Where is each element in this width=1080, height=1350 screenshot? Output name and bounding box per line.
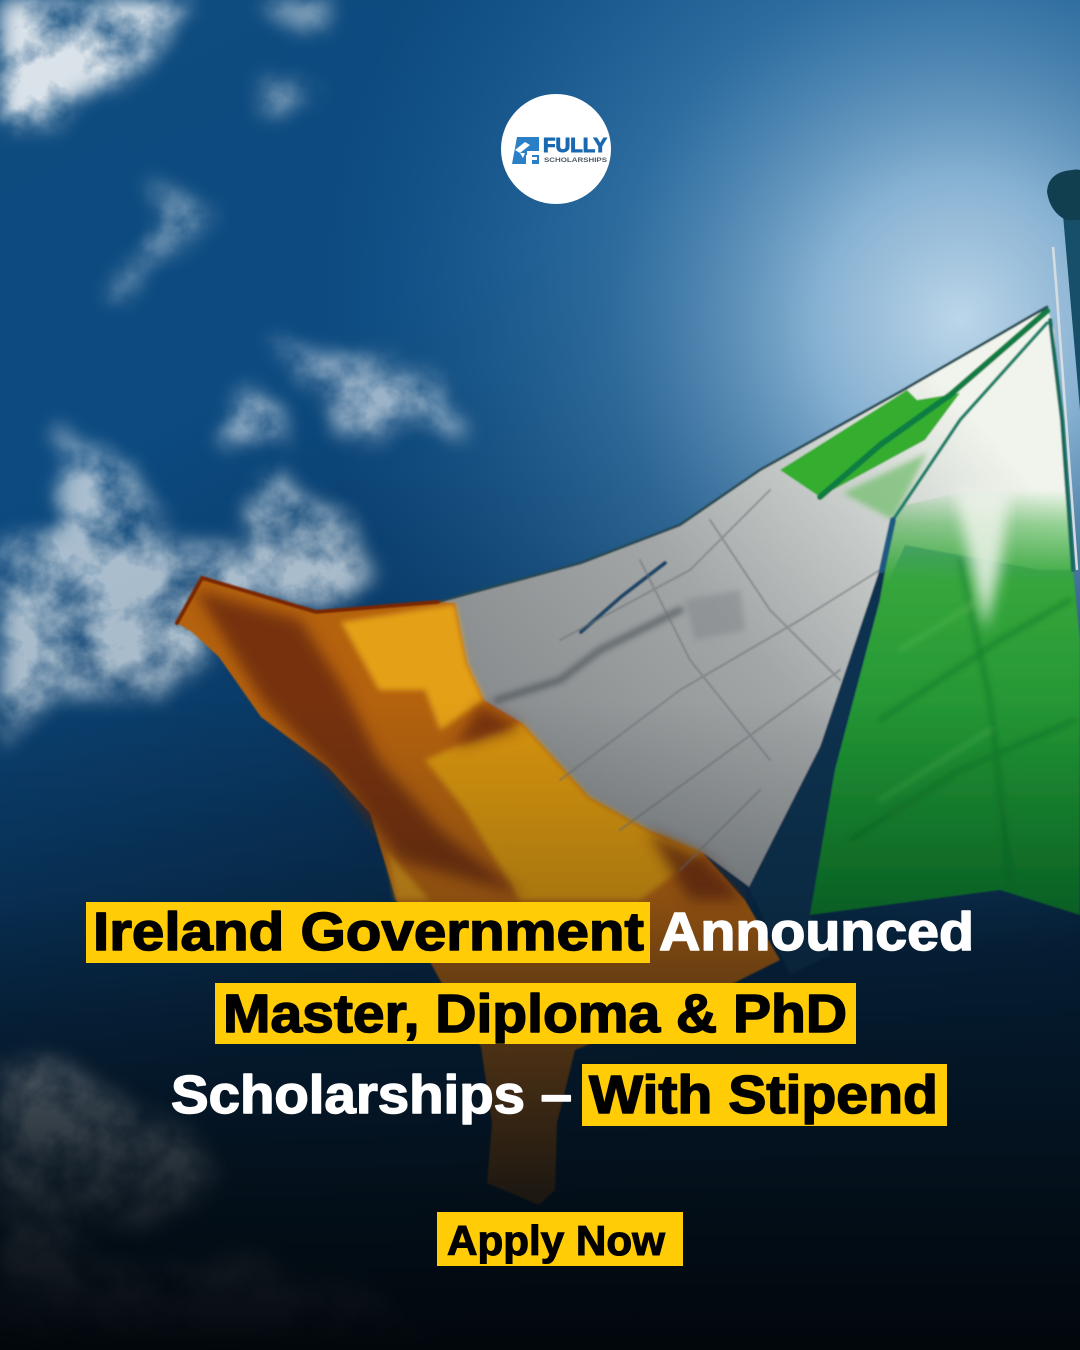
flag pole <box>1047 170 1080 570</box>
flag: orange bright panels <box>341 604 703 900</box>
apply now button: Apply Now <box>447 1217 665 1264</box>
flag: dark green strips <box>177 307 1073 623</box>
headline line 3 <box>171 1064 947 1126</box>
headline line 3: With Stipend <box>589 1065 938 1125</box>
headline line 2: Master, Diploma & PhD <box>223 984 847 1044</box>
logo badge <box>501 94 611 204</box>
icon: graduation cap logo mark <box>512 137 539 164</box>
clouds <box>0 0 478 1350</box>
flag: green upper fold <box>780 390 960 497</box>
flag: orange dark folds <box>195 590 745 900</box>
headline <box>86 902 974 1126</box>
headline line 1 <box>86 902 974 963</box>
headline line 3: Scholarships – <box>171 1065 572 1125</box>
headline line 1: Announced <box>659 902 974 962</box>
dark overlay <box>0 700 1080 1350</box>
logo wordmark: FULLY <box>543 134 607 157</box>
flag: orange band <box>177 578 780 1205</box>
headline line 1: Ireland Government <box>93 902 644 962</box>
flag: pale green patch <box>843 453 927 520</box>
Irish flag <box>177 307 1080 1205</box>
logo subtitle: SCHOLARSHIPS <box>544 157 608 164</box>
flag: shadow fold <box>749 530 893 975</box>
flag: folds in white band <box>497 490 880 870</box>
flag: white light streak <box>955 490 1010 630</box>
flag: white centre band <box>438 307 1073 887</box>
flag: green creases <box>850 560 1075 880</box>
flag: green near band <box>810 470 1080 915</box>
